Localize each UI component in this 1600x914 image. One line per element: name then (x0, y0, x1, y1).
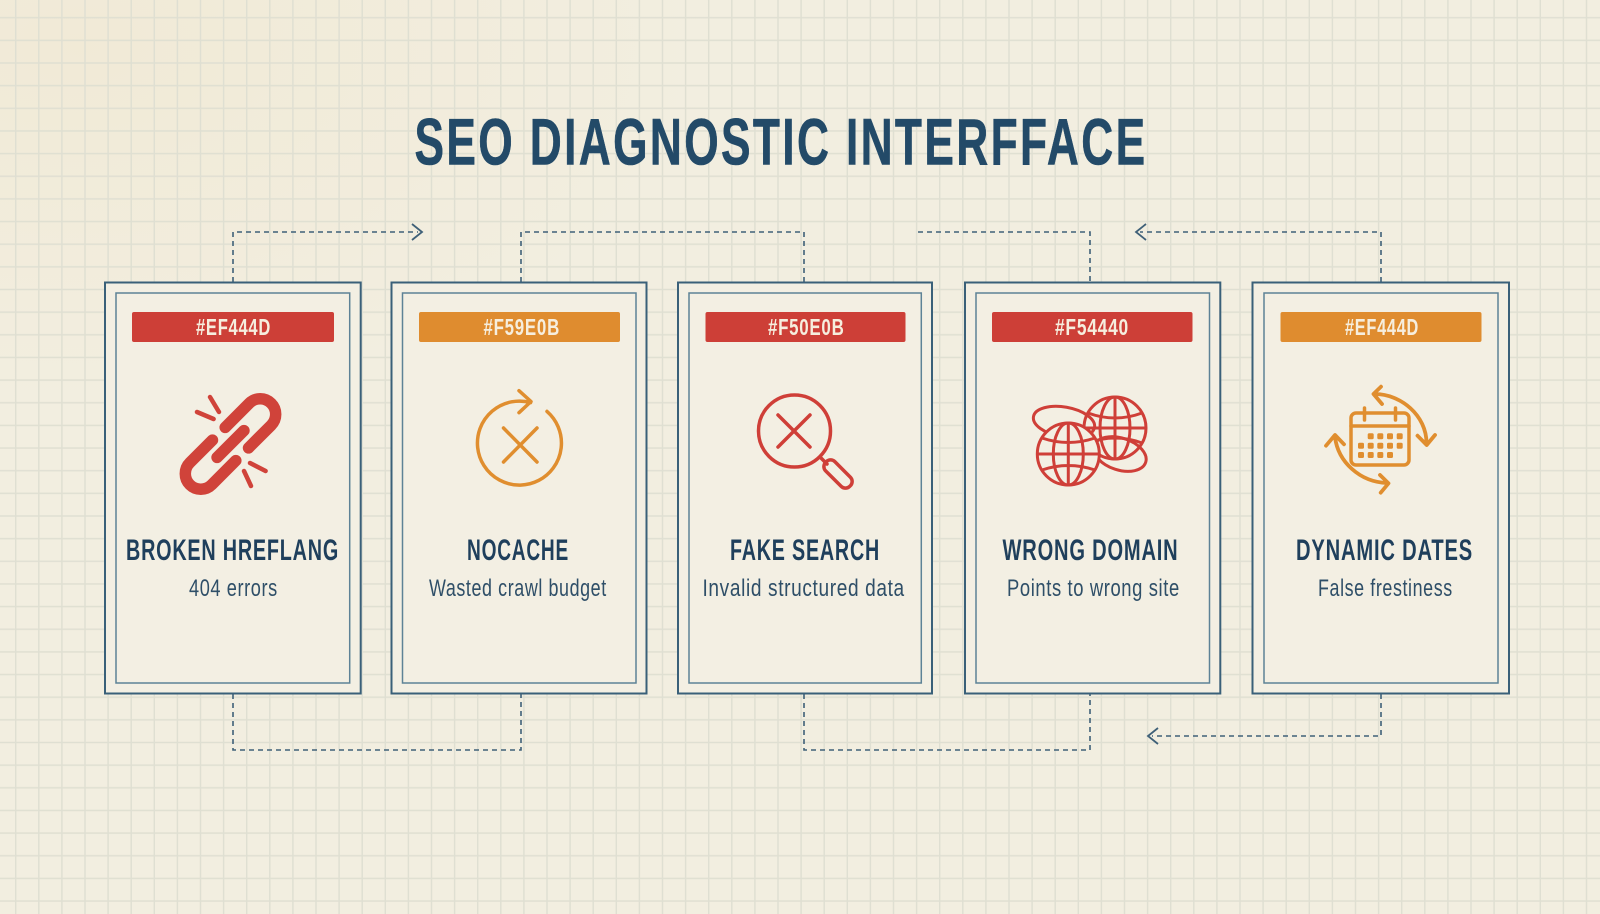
icon: calendar with cycle arrows (1326, 387, 1435, 493)
badge: #EF444D: #EF444D (1345, 314, 1419, 340)
heading: nocache: NOCACHE (467, 534, 569, 567)
badge: #EF444D (1280, 312, 1482, 342)
description: 404 errors: 404 errors (189, 575, 278, 602)
badge: #F50E0B (706, 312, 906, 342)
title: SEO DIAGNOSTIC INTERFFACE (414, 104, 1148, 178)
description: points to wrong site: Points to wrong site (1007, 575, 1180, 602)
heading: wrong domain: WRONG DOMAIN (1002, 534, 1178, 567)
badge: #F54440: #F54440 (1055, 314, 1129, 340)
description: invalid structured data: Invalid structured data (702, 575, 905, 602)
badge: #EF444D (132, 312, 334, 342)
panel: dynamic dates (1252, 282, 1509, 694)
icon: overlapping globes (1031, 397, 1151, 485)
badge: #F54440 (992, 312, 1192, 342)
heading: broken hreflang: BROKEN HREFLANG (126, 534, 339, 567)
description: wasted crawl budget: Wasted crawl budget (429, 575, 607, 602)
panel: fake search (678, 282, 932, 694)
panel: nocache (392, 282, 646, 694)
badge: #F59E0B (419, 312, 620, 342)
icon: refresh circle with x (477, 391, 561, 485)
panel: wrong domain (965, 282, 1220, 694)
description: false frestiness: False frestiness (1318, 575, 1453, 602)
badge: #F59E0B: #F59E0B (484, 314, 560, 340)
panel: broken hreflang (105, 282, 361, 694)
icon: magnifier with x (758, 395, 855, 491)
heading: fake search: FAKE SEARCH (730, 534, 880, 567)
heading: dynamic dates: DYNAMIC DATES (1296, 534, 1473, 567)
badge: #EF444D: #EF444D (196, 314, 271, 340)
icon: broken chain link (179, 392, 282, 496)
connectors: bottom dashed arrows (233, 694, 1381, 750)
connectors: top dashed arrows (233, 224, 1381, 282)
badge: #F50E0B: #F50E0B (768, 314, 844, 340)
